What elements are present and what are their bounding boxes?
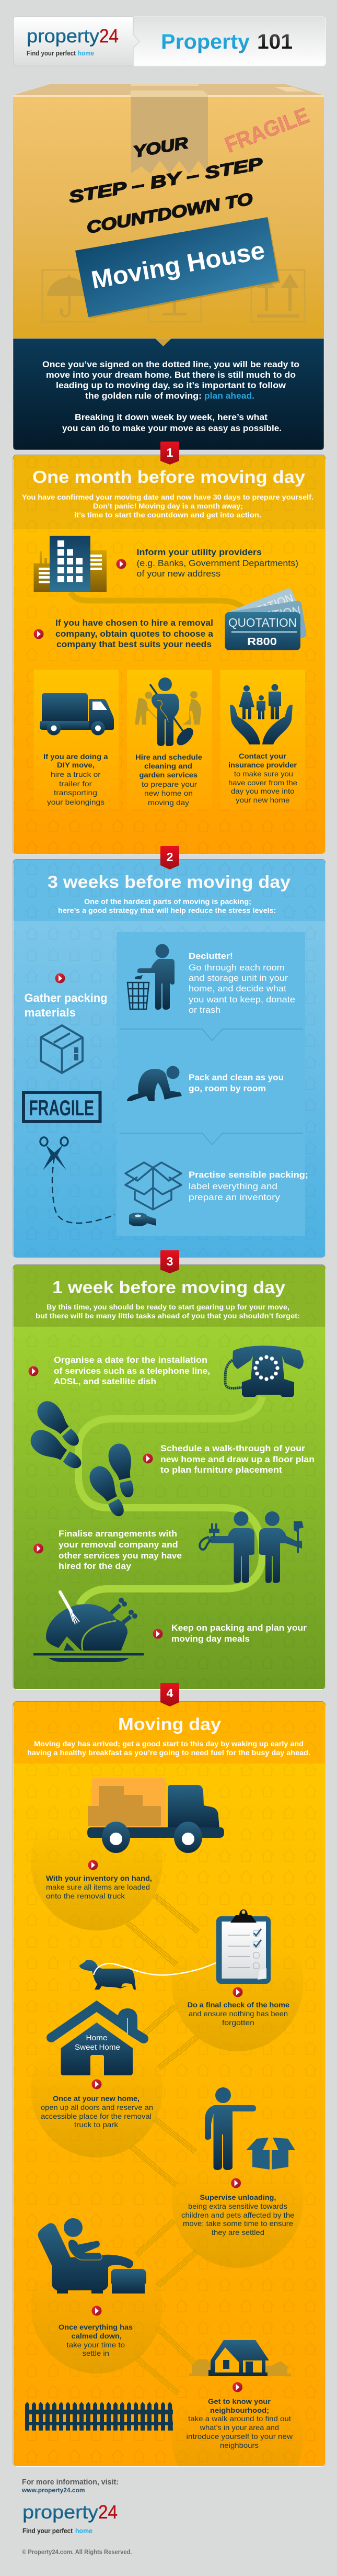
bullet	[233, 2382, 242, 2392]
badge: step 3	[160, 1250, 179, 1273]
logo panel	[14, 17, 140, 66]
intro panel: Breaking it down week by week, here’s what	[75, 412, 268, 422]
text: pack and clean: Pack and clean as you	[189, 1072, 284, 1082]
text: finalise arrangements: other services you may have	[59, 1551, 182, 1561]
text: declutter: home, and decide what	[189, 984, 286, 993]
icon: cleaners	[135, 677, 201, 748]
text: finalise arrangements: Finalise arrangements with	[59, 1529, 177, 1539]
badge: step 2	[160, 846, 179, 869]
divider arrow	[120, 1133, 303, 1145]
text: new home: accessible place for the removal	[41, 2112, 152, 2120]
icon: tape roll	[129, 1213, 156, 1226]
text: final check: forgotten	[222, 2018, 254, 2027]
text: settle in: Once everything has	[59, 2323, 133, 2331]
text: pack and clean	[189, 1072, 284, 1093]
badge: step 3: 3	[167, 1255, 173, 1268]
footer logo: home	[75, 2527, 92, 2535]
intro text: it’s time to start the countdown and get into action.	[74, 511, 261, 519]
bullet	[33, 629, 44, 639]
icon: clipboard checklist	[216, 1910, 271, 1984]
text: neighbourhood: take a walk around to find out	[188, 2414, 291, 2423]
title: handwritten lines: YOUR	[132, 133, 190, 161]
text: declutter: Go through each room	[189, 963, 285, 973]
text: neighbourhood: what’s in your area and	[199, 2423, 279, 2432]
heading: Property 101: 101	[257, 30, 293, 53]
connector path	[71, 592, 247, 611]
text: utility providers: of your new address	[137, 569, 220, 579]
panel: 3 weeks before moving day	[13, 859, 326, 1258]
text	[43, 752, 108, 806]
text: removal company: If you have chosen to hire a removal	[55, 618, 213, 628]
panel: moving day	[13, 1701, 326, 2506]
text: day you move into	[231, 787, 295, 795]
bullet	[33, 1543, 43, 1554]
text: removal company	[55, 618, 214, 649]
bullet	[28, 1366, 39, 1376]
heading: Property 101: Property	[161, 30, 250, 53]
text: settle in: settle in	[83, 2349, 109, 2357]
text: declutter: and storage unit in your	[189, 973, 288, 983]
intro text: but there will be many little tasks ahead of you that you shouldn’t forget:	[36, 1312, 300, 1320]
text: organise services: of services such as a telephone line,	[54, 1366, 210, 1376]
icon: home sweet home: Home	[86, 2033, 108, 2042]
divider arrow	[120, 1029, 303, 1041]
badge: step 4: 4	[167, 1686, 173, 1700]
text: sensible packing	[189, 1170, 308, 1202]
text: supervise unloading	[181, 2193, 295, 2236]
stamp: fragile: FRAGILE	[222, 103, 312, 157]
text: walk-through	[160, 1443, 315, 1475]
text: visit: For more information, visit:	[22, 2478, 119, 2487]
icon: person in armchair	[38, 2218, 146, 2293]
heading: 3 weeks before moving day	[48, 872, 291, 891]
label: moving house	[75, 217, 280, 319]
icon: home sweet home	[51, 2006, 144, 2075]
title: handwritten lines: STEP – BY – STEP	[67, 154, 264, 207]
text: moving day	[148, 798, 189, 807]
text: to make sure you	[234, 770, 293, 778]
panel: one month before moving day	[13, 455, 326, 854]
panel: cleaning and garden services	[127, 670, 212, 809]
icon: handling symbols	[42, 270, 305, 322]
text	[135, 753, 202, 807]
icon: person with box	[205, 2087, 295, 2170]
text: finalise arrangements: hired for the day	[59, 1561, 132, 1571]
text: visit: www.property24.com	[21, 2487, 85, 2494]
text: new home	[41, 2094, 153, 2129]
text: final check	[188, 2001, 289, 2027]
intro text: here’s a good strategy that will help reduce the stress levels:	[58, 907, 276, 914]
logo panel: property	[27, 25, 99, 47]
text: supervise unloading: they are settled	[212, 2228, 264, 2236]
copyright: © Property24.com. All Rights Reserved.	[22, 2549, 132, 2556]
intro text: Don’t panic! Moving day is a month away;	[93, 502, 243, 510]
tinted circles behind steps	[31, 1860, 303, 2466]
icon: fragile label	[24, 1092, 100, 1122]
panel: DIY move	[33, 670, 119, 809]
text: load truck	[46, 1874, 152, 1900]
icon: neighbourhood houses	[189, 2340, 291, 2376]
text: walk-through: new home and draw up a floor plan	[160, 1454, 315, 1464]
text: final check: and ensure nothing has been	[189, 2009, 288, 2018]
intro text	[22, 493, 313, 519]
bullet	[231, 2178, 241, 2188]
cardboard box hero	[13, 84, 324, 338]
icon: quotation cards: QUOTATION	[231, 591, 295, 627]
text: neighbourhood: neighbourhood;	[210, 2406, 269, 2414]
text: organise services: Organise a date for the installation	[54, 1355, 207, 1365]
text: new home: Once at your new home,	[53, 2094, 140, 2103]
badge: step 4	[160, 1683, 179, 1707]
icon: loaded truck	[87, 1778, 224, 1853]
icon: quotation cards: QUOTATION	[228, 616, 297, 629]
text: neighbourhood: neighbours	[220, 2441, 259, 2449]
winding path	[78, 1397, 262, 1605]
text: sensible packing: prepare an inventory	[189, 1192, 281, 1202]
intro panel: Once you’ve signed on the dotted line, you will be ready to	[42, 359, 299, 369]
text: load truck: make sure all items are loaded	[46, 1883, 150, 1891]
text: new home: truck to park	[74, 2120, 119, 2129]
label: moving house: Moving House	[89, 236, 267, 295]
text: sensible packing: Practise sensible packing;	[189, 1170, 308, 1180]
text: new home on	[144, 789, 193, 797]
icon: fragile label: FRAGILE	[29, 1095, 94, 1120]
text: walk-through: to plan furniture placement	[160, 1465, 282, 1475]
text: trailer for	[59, 779, 92, 788]
icon: two service men	[200, 1511, 304, 1583]
intro panel	[13, 338, 324, 450]
text: pack and clean: go, room by room	[189, 1083, 266, 1093]
text: walk-through: Schedule a walk-through of your	[160, 1443, 305, 1453]
icon: telephone	[225, 1346, 304, 1397]
intro panel: the golden rule of moving:	[85, 391, 202, 401]
text: neighbourhood	[187, 2397, 293, 2449]
text: have cover from the	[228, 778, 297, 787]
text: garden services	[139, 771, 197, 779]
badge: step 1: 1	[167, 446, 173, 459]
bullet	[92, 2306, 101, 2315]
text: settle in: take your time to	[67, 2341, 125, 2349]
icon: footprints	[26, 1396, 140, 1521]
header bar	[14, 17, 326, 66]
icon: roast turkey	[33, 1592, 144, 1662]
bullet	[116, 559, 126, 569]
text: moving day meals: moving day meals	[171, 1634, 250, 1644]
text: supervise unloading: Supervise unloading,	[200, 2193, 276, 2201]
bullet	[92, 2079, 101, 2089]
bullet	[143, 1453, 153, 1464]
text: utility providers: (e.g. Banks, Government Departments)	[137, 558, 298, 568]
text: sensible packing: label everything and	[189, 1181, 277, 1191]
intro panel: leading up to moving day, so it’s important to follow	[56, 380, 286, 390]
text: cleaning and	[144, 762, 192, 770]
icon: dachshund on leash	[79, 1960, 216, 1990]
icon: scissors	[40, 1137, 115, 1223]
footer logo	[22, 2501, 118, 2535]
icon: office buildings	[33, 536, 107, 592]
logo panel: Find your perfect	[27, 50, 76, 57]
logo panel: 24	[99, 25, 119, 47]
text: moving day meals: Keep on packing and plan your	[171, 1623, 307, 1633]
footer logo: 24	[98, 2501, 118, 2523]
text: removal company: company, obtain quotes to choose a	[55, 629, 214, 639]
icon: open box	[125, 1162, 181, 1210]
text: organise services	[54, 1355, 210, 1386]
icon: person bending	[127, 1066, 182, 1101]
bullet	[55, 973, 65, 984]
text: supervise unloading: move; take some time to ensure	[183, 2219, 293, 2228]
intro panel: you can do to make your move as easy as possible.	[62, 423, 282, 433]
text: utility providers	[137, 547, 298, 579]
bullet	[233, 1987, 242, 1997]
text: Contact your	[239, 752, 287, 760]
badge: step 1	[160, 442, 179, 465]
text: load truck: With your inventory on hand,	[46, 1874, 152, 1882]
intro panel: move into your dream home. But there is still much to do	[46, 370, 296, 380]
text: finalise arrangements: your removal company and	[59, 1540, 178, 1550]
text: neighbourhood: Get to know your	[208, 2397, 271, 2405]
icon: family in hands	[230, 684, 293, 744]
text: supervise unloading: children and pets affected by the	[181, 2211, 295, 2219]
text	[228, 752, 297, 804]
text: organise services: ADSL, and satellite dish	[54, 1376, 156, 1386]
heading: Moving day	[118, 1714, 222, 1734]
icon: quotation cards	[225, 587, 307, 650]
text: insurance provider	[228, 761, 297, 769]
text: declutter: Declutter!	[189, 951, 233, 961]
inner panel	[117, 932, 305, 1236]
text: load truck: onto the removal truck	[46, 1892, 125, 1900]
panel: 1 week before moving day	[13, 1264, 326, 1690]
text: final check: Do a final check of the home	[188, 2001, 289, 2009]
text: gather packing materials: materials	[24, 1006, 76, 1019]
badge: step 2: 2	[167, 850, 173, 864]
icon: quotation cards: R800	[247, 636, 277, 648]
packing tape	[131, 97, 208, 174]
text: your belongings	[47, 798, 104, 806]
intro text: You have confirmed your moving date and now have 30 days to prepare yourself.	[22, 493, 313, 501]
intro panel: plan ahead.	[204, 391, 254, 401]
logo panel: home	[78, 50, 94, 57]
heading: Property 101	[161, 30, 293, 53]
footer logo: property	[22, 2501, 98, 2523]
intro text	[27, 1740, 310, 1757]
heading: One month before moving day	[32, 467, 306, 487]
text: neighbourhood: introduce yourself to your new	[187, 2432, 293, 2441]
text: If you are doing a	[43, 752, 108, 761]
icon: picket fence	[25, 2402, 173, 2431]
icon: quotation cards: QUOTATION	[232, 604, 301, 628]
text: moving day meals	[171, 1623, 307, 1644]
text: DIY move,	[57, 761, 95, 769]
intro text: having a healthy breakfast as you’re going to need fuel for the busy day ahead.	[27, 1749, 310, 1757]
text: settle in	[59, 2323, 133, 2357]
intro text	[58, 898, 276, 914]
intro text: One of the hardest parts of moving is packing;	[84, 898, 251, 906]
intro text: Moving day has arrived; get a good start to this day by waking up early and	[34, 1740, 304, 1748]
text: new home: open up all doors and reserve an	[41, 2103, 153, 2111]
text: to prepare your	[142, 780, 197, 788]
text: declutter	[189, 951, 295, 1015]
text: finalise arrangements	[59, 1529, 182, 1571]
title: handwritten lines: COUNTDOWN TO	[85, 189, 254, 237]
title: handwritten lines	[67, 133, 264, 237]
icon: truck	[40, 693, 114, 736]
intro text	[36, 1303, 300, 1320]
text: utility providers: Inform your utility providers	[137, 547, 262, 557]
icon: closed box	[41, 1025, 83, 1073]
text: hire a truck or	[51, 770, 101, 778]
panel: insurance provider	[220, 670, 305, 809]
footer	[21, 2478, 132, 2556]
text: gather packing materials: Gather packing	[24, 991, 108, 1004]
heading: 1 week before moving day	[52, 1278, 286, 1297]
bullet	[88, 1860, 98, 1870]
tyre tracks	[125, 1894, 200, 2395]
intro text: By this time, you should be ready to start gearing up for your move,	[47, 1303, 289, 1311]
text: declutter: or trash	[189, 1005, 220, 1015]
text: supervise unloading: being extra sensitive towards	[188, 2202, 287, 2210]
text: Hire and schedule	[135, 753, 202, 761]
bullet	[153, 1629, 163, 1639]
footer logo: Find your perfect	[22, 2527, 73, 2535]
text: your new home	[236, 796, 290, 804]
icon: person with bin	[127, 944, 175, 1010]
text: visit	[21, 2478, 119, 2494]
icon: home sweet home: Sweet Home	[75, 2043, 120, 2052]
text: declutter: you want to keep, donate	[189, 995, 295, 1004]
text: transporting	[54, 788, 97, 797]
text: settle in: calmed down,	[71, 2332, 122, 2340]
text: gather packing materials	[24, 991, 108, 1019]
text: removal company: company that best suits your needs	[56, 639, 212, 649]
